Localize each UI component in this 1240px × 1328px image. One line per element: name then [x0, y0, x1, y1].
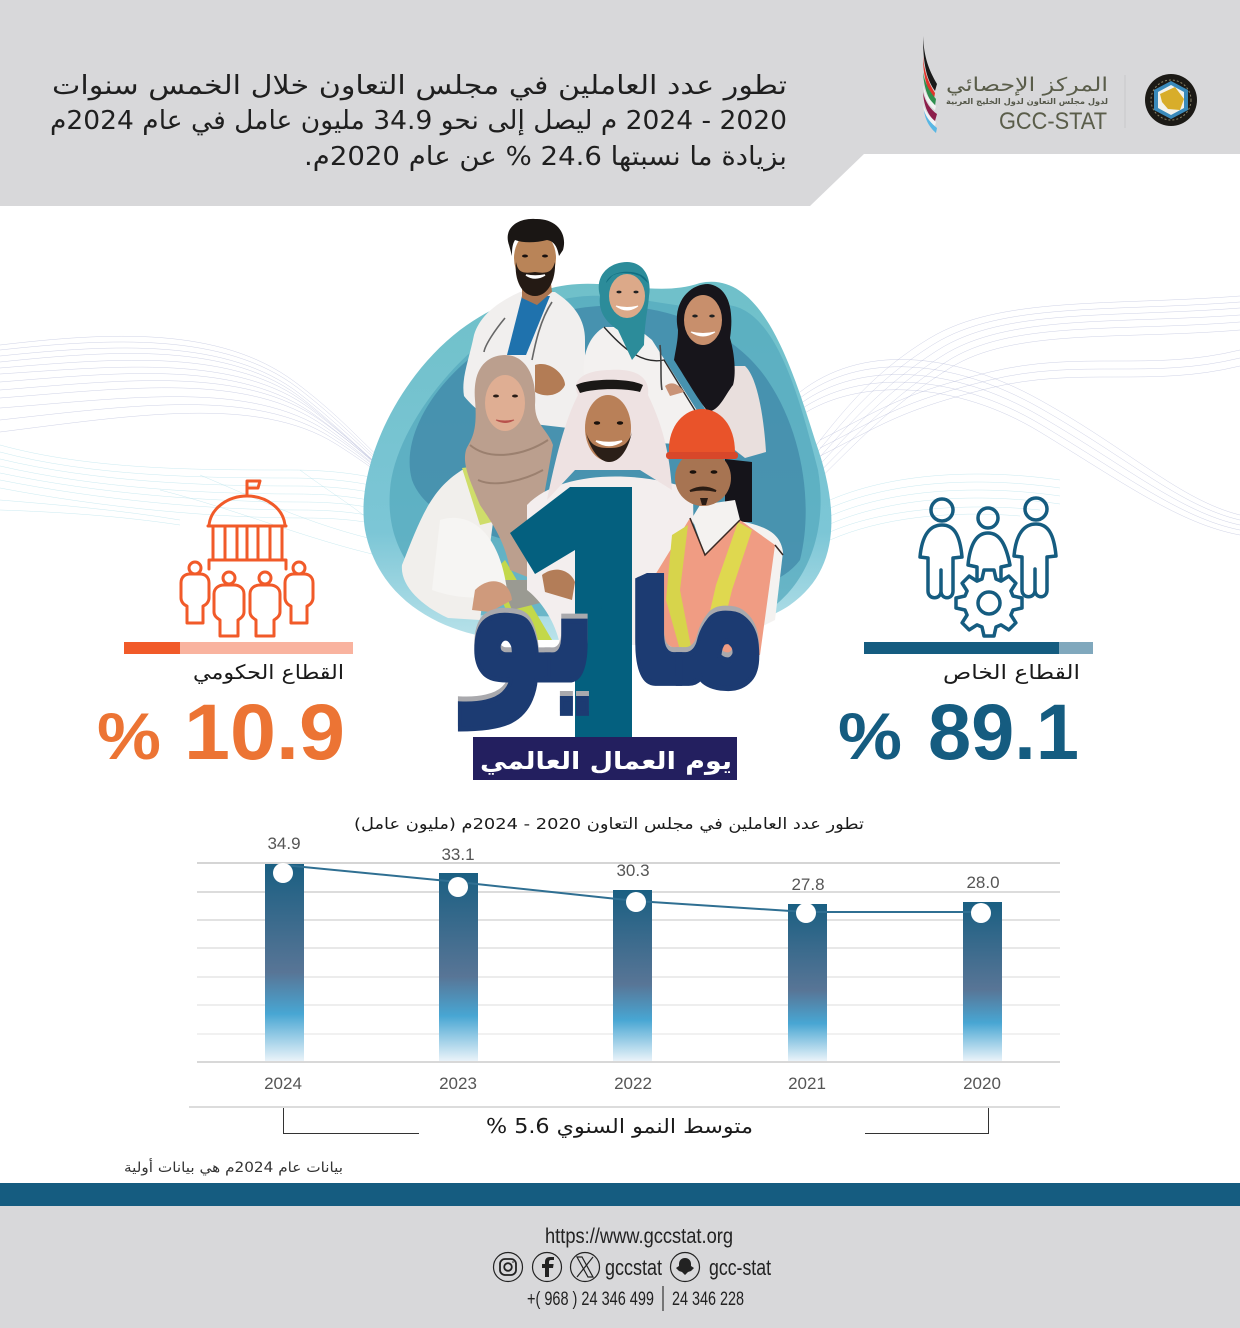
value: 89.1 % [838, 687, 1079, 776]
bars [265, 864, 1002, 1061]
footer url: https://www.gccstat.org [545, 1225, 733, 1248]
title art: مايو: يو [459, 488, 597, 725]
value: 10.9 % [97, 687, 345, 776]
teal blob background [363, 282, 831, 640]
phone numbers: +( 968 ) 24 346 499 [527, 1289, 654, 1310]
value labels: 34.9 [267, 834, 301, 853]
trend markers [273, 863, 991, 923]
value labels: 28.0 [966, 873, 1000, 892]
worker: man in ghutra [527, 370, 695, 645]
bar chart: workers 2020-2024 [197, 834, 1060, 1093]
value: 10.9 %: % [97, 699, 161, 773]
icon: x [570, 1252, 600, 1282]
phone numbers: 24 346 228 [672, 1289, 744, 1310]
logo latin name: GCC-STAT [999, 108, 1107, 135]
value labels: 33.1 [441, 845, 475, 864]
title art: numeral 1: 1 [596, 603, 608, 625]
header statement: 2020 - 2024 م ليصل إلى نحو 34.9 مليون عامل في عام 2024م [50, 106, 787, 136]
label: government sector: القطاع الحكومي [193, 660, 344, 685]
panel: government sector [97, 481, 353, 776]
header band [0, 0, 1240, 206]
banner: world labour day: يوم العمال العالمي [480, 747, 732, 775]
growth bracket [284, 1108, 988, 1134]
handle: gccstat: gccstat [605, 1255, 662, 1280]
logo emblem [1145, 74, 1197, 126]
background waves: right cyan [830, 474, 1060, 540]
handle: gcc-stat: gcc-stat [709, 1255, 771, 1280]
footer [0, 1183, 1240, 1328]
title art: مايو: ما [625, 477, 768, 737]
title art: numeral 1 [510, 487, 632, 738]
year labels: 2024 [264, 1074, 302, 1093]
year labels: 2020 [963, 1074, 1001, 1093]
worker: female doctor in teal hijab [584, 262, 700, 445]
icon: instagram [494, 1252, 522, 1282]
year labels [264, 1074, 1001, 1093]
trend line [283, 865, 981, 912]
central illustration: workers [363, 219, 831, 655]
worker: man in orange helmet and vest [652, 409, 783, 655]
icon: people and gear [920, 498, 1056, 636]
panel: private sector [838, 498, 1093, 776]
header statement: بزيادة ما نسبتها 24.6 % عن عام 2020م. [304, 142, 787, 172]
background waves: left cyan [0, 445, 490, 570]
year labels: 2023 [439, 1074, 477, 1093]
value: 10.9 %: 10.9 [184, 687, 345, 776]
value labels [267, 834, 1000, 894]
logo arabic subtitle: لدول مجلس التعاون لدول الخليج العربية [946, 97, 1108, 107]
progress bar: government share [124, 642, 353, 654]
worker: male doctor [463, 219, 585, 430]
icon: facebook [532, 1252, 562, 1282]
value labels: 30.3 [616, 861, 650, 880]
icon: snapchat [670, 1252, 700, 1282]
header statement: تطور عدد العاملين في مجلس التعاون خلال الخمس سنوات [52, 71, 787, 101]
year labels: 2022 [614, 1074, 652, 1093]
worker: woman in beige hijab with helmet [402, 355, 553, 640]
logo: GCC-STAT [923, 36, 1197, 135]
average growth text: متوسط النمو السنوي 5.6 % [486, 1114, 753, 1139]
title art: مايو [458, 573, 760, 732]
progress bar: private share [864, 642, 1093, 654]
logo arabic name: المركز الإحصائي [946, 74, 1108, 96]
background waves: left [0, 336, 462, 536]
header statement [50, 71, 787, 172]
year labels: 2021 [788, 1074, 826, 1093]
banner: world labour day [473, 737, 737, 780]
value: 89.1 %: 89.1 [928, 687, 1079, 776]
title art: مايو: يو [459, 493, 597, 730]
chart title: تطور عدد العاملين في مجلس التعاون 2020 - 2024م (مليون عامل) [354, 815, 864, 834]
icon: government building and people [181, 481, 313, 636]
footnote: بيانات عام 2024م هي بيانات أولية [124, 1158, 343, 1176]
logo ribbon [923, 36, 937, 133]
value labels: 27.8 [791, 875, 825, 894]
value: 89.1 %: % [838, 699, 902, 773]
label: private sector: القطاع الخاص [943, 660, 1080, 684]
worker: woman in black hijab [674, 284, 766, 522]
background waves: right [790, 296, 1240, 535]
phone numbers [527, 1286, 744, 1311]
title art: مايو: ما [625, 472, 768, 732]
